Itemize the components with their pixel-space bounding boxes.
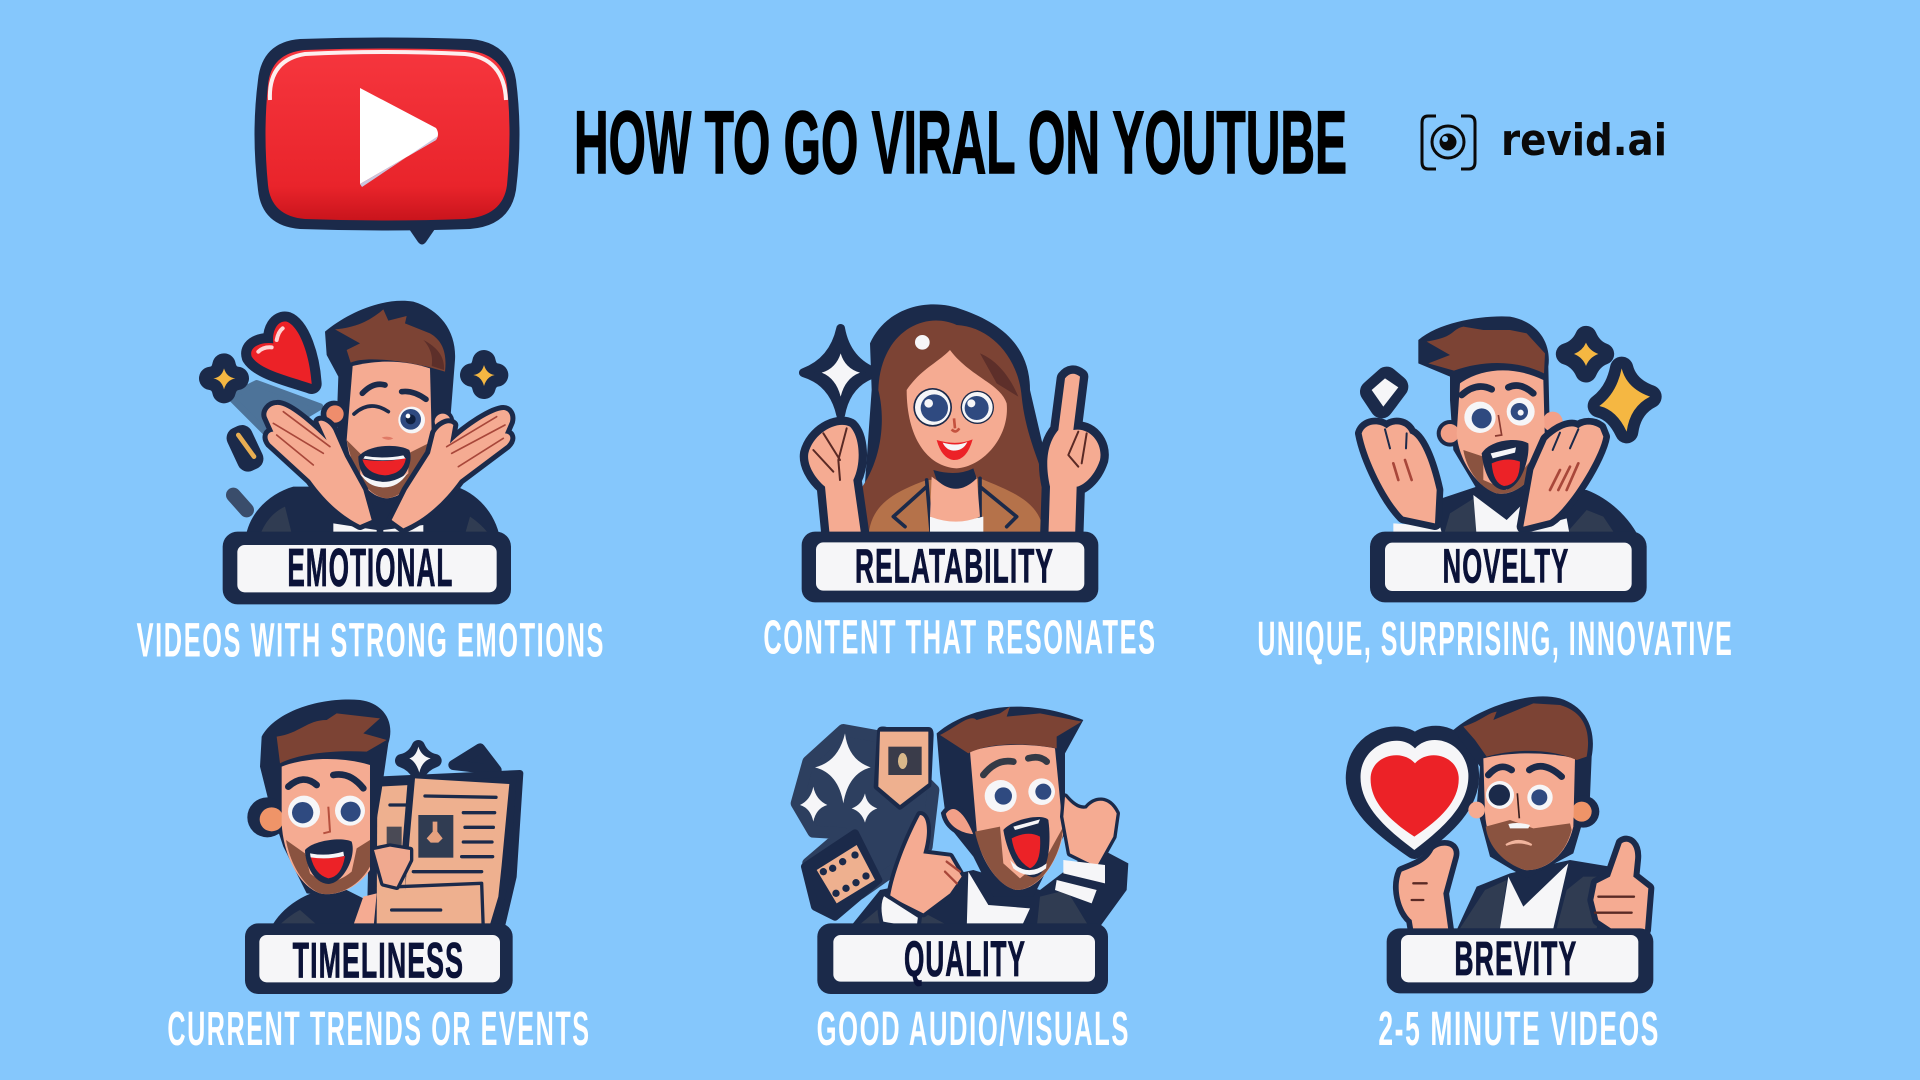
character <box>858 304 1052 538</box>
label: quality: QUALITY <box>904 931 1026 987</box>
newspaper <box>370 747 520 933</box>
caption: emotional: VIDEOS WITH STRONG EMOTIONS <box>137 614 605 668</box>
logo: revid.ai <box>1422 115 1667 169</box>
sticker: emotional <box>137 301 605 668</box>
logo: revid.ai: revid.ai <box>1501 115 1667 166</box>
label: brevity: BREVITY <box>1454 932 1577 986</box>
sparkles <box>1372 337 1650 432</box>
character <box>1453 696 1613 930</box>
label: timeliness: TIMELINESS <box>293 932 464 988</box>
sticker: relatability <box>763 304 1157 664</box>
label: relatability: RELATABILITY <box>855 540 1054 594</box>
label: emotional: EMOTIONAL <box>287 539 453 598</box>
hands <box>808 374 1101 538</box>
hands <box>1399 842 1648 940</box>
sparkles, film and dice <box>797 729 933 917</box>
label: relatability <box>802 532 1098 602</box>
caption: brevity: 2-5 MINUTE VIDEOS <box>1378 1002 1660 1056</box>
label: brevity <box>1387 928 1653 993</box>
sticker: novelty <box>1257 316 1733 666</box>
sticker: quality <box>797 707 1130 1056</box>
hands <box>880 797 1117 930</box>
hands <box>1362 424 1603 538</box>
character <box>1393 316 1640 540</box>
caption: quality: GOOD AUDIO/VISUALS <box>817 1002 1130 1056</box>
label: emotional <box>223 532 511 604</box>
character <box>247 700 410 937</box>
character <box>245 301 501 543</box>
sticker: timeliness <box>167 700 591 1056</box>
label: quality <box>817 923 1108 994</box>
label: timeliness <box>245 923 513 994</box>
hands <box>266 405 510 528</box>
label: novelty: NOVELTY <box>1443 540 1569 594</box>
heart sign <box>1355 735 1470 850</box>
sparkle <box>803 328 877 415</box>
decorative sparks and heart <box>211 321 497 510</box>
sticker: brevity <box>1355 696 1660 1056</box>
caption: timeliness: CURRENT TRENDS OR EVENTS <box>167 1002 591 1056</box>
icon: youtube play logo <box>254 38 520 244</box>
label: novelty <box>1370 532 1647 602</box>
caption: relatability: CONTENT THAT RESONATES <box>763 610 1157 664</box>
character <box>845 707 1128 933</box>
